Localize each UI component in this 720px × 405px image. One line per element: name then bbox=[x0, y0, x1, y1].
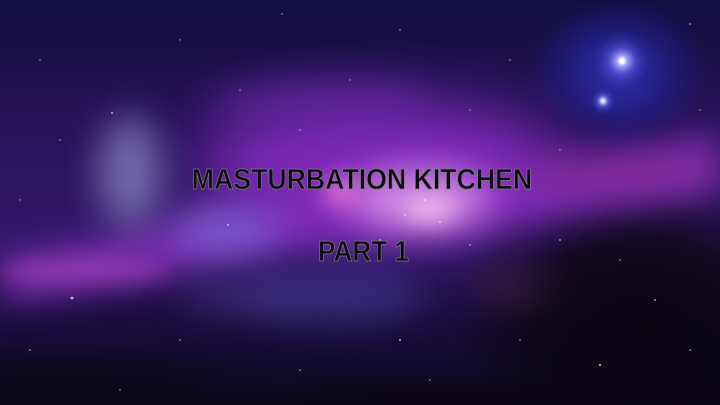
subtitle: PART 1 bbox=[318, 236, 409, 268]
blue-grey cloud bbox=[98, 116, 162, 228]
title: MASTURBATION KITCHEN bbox=[191, 164, 532, 196]
blue star glow bbox=[528, 0, 708, 157]
pink core bbox=[350, 170, 490, 230]
dark corners bbox=[450, 190, 720, 405]
purple band bbox=[0, 130, 720, 300]
